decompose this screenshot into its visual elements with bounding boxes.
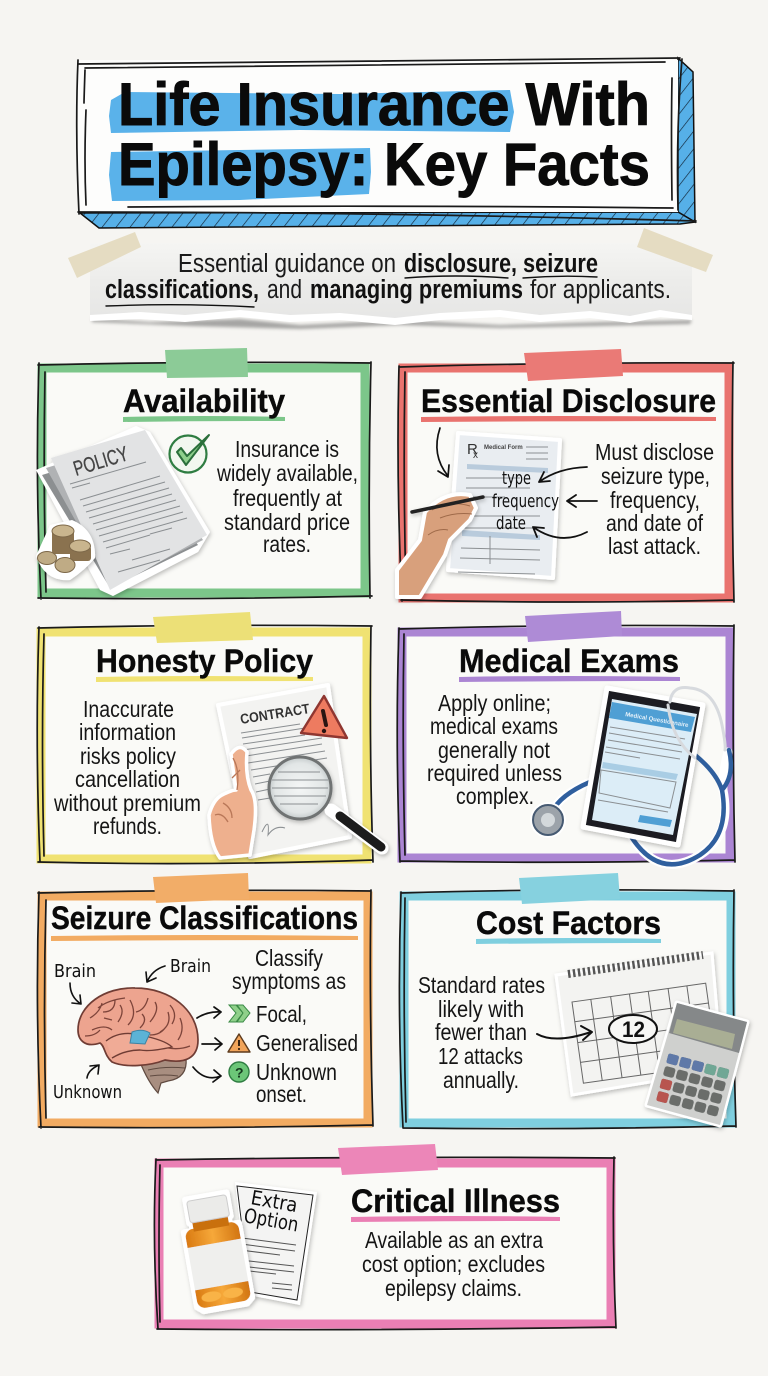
body text: information — [79, 719, 176, 745]
body text: fewer than — [435, 1019, 527, 1045]
body text: Available as an extra — [365, 1227, 544, 1253]
heading: Cost Factors — [476, 905, 661, 941]
body text: seizure type, — [601, 463, 710, 489]
body text: risks policy — [80, 743, 176, 769]
illustration: tablet questionnaire — [583, 688, 703, 845]
body text — [427, 690, 562, 809]
heading: Critical Illness — [351, 1183, 560, 1219]
tape — [519, 873, 620, 904]
subtitle text: managing premiums — [310, 276, 523, 304]
body text: refunds. — [93, 813, 162, 839]
body text: medical exams — [430, 713, 558, 739]
body text: last attack. — [608, 533, 701, 559]
body text: cost option; excludes — [362, 1251, 545, 1277]
panel: critical illness — [154, 1144, 616, 1330]
illustration: stethoscope — [530, 750, 731, 864]
title box — [77, 58, 696, 228]
icon: coins — [36, 520, 95, 580]
subtitle text: Essential guidance on — [178, 250, 396, 278]
arrows: brain labels — [70, 966, 165, 1078]
illustration: policy papers — [36, 426, 210, 596]
body text: Inaccurate — [83, 696, 174, 722]
body text: Generalised — [256, 1030, 358, 1056]
title — [118, 71, 650, 198]
tape — [524, 349, 623, 381]
body text: cancellation — [75, 766, 180, 792]
body text — [216, 436, 358, 557]
illustration: tablet questionnaire: Medical Questionnaire — [625, 712, 689, 729]
arrow: to form — [437, 428, 449, 477]
illustration: hand with pen — [397, 494, 483, 597]
labels: brain parts — [53, 956, 211, 1103]
body text — [418, 972, 545, 1093]
body text: 12 attacks — [438, 1043, 523, 1069]
body text: Must disclose — [595, 439, 714, 465]
icon: magnifying glass — [269, 757, 382, 848]
icon: warning — [228, 1034, 250, 1052]
handwritten labels: frequency — [492, 491, 559, 512]
tape — [338, 1144, 438, 1175]
illustration: medical form: x — [473, 450, 478, 461]
arrows: to classes — [193, 1007, 222, 1082]
tape — [153, 873, 249, 903]
body text: complex. — [456, 783, 534, 809]
illustration: medical form — [448, 433, 560, 578]
body text: symptoms as — [232, 968, 346, 994]
body text: without premium — [53, 790, 201, 816]
title: Epilepsy: Key Facts — [118, 131, 650, 198]
illustration: contract: CONTRACT — [239, 700, 311, 727]
body text — [53, 696, 201, 839]
subtitle text: disclosure, — [404, 250, 517, 278]
body text: frequency, — [610, 487, 700, 513]
callout: circled 12: 12 — [622, 1017, 645, 1042]
body text: Insurance is — [235, 436, 339, 462]
icon: warning triangle — [301, 696, 347, 738]
body text: Apply online; — [438, 690, 551, 716]
subtitle text: seizure — [523, 250, 598, 278]
labels: brain parts: Brain — [54, 961, 96, 982]
body text: widely available, — [216, 460, 358, 486]
illustration: policy papers: POLICY — [71, 442, 131, 481]
subtitle torn paper — [90, 243, 692, 329]
handwritten labels: date — [496, 513, 526, 534]
labels: brain parts: Unknown — [53, 1082, 122, 1103]
subtitle text: classifications, — [105, 276, 259, 304]
body text: Focal, — [256, 1001, 307, 1027]
panel: seizure classifications — [37, 873, 373, 1128]
panel: cost factors — [399, 873, 747, 1129]
icon: chevrons — [229, 1005, 250, 1022]
panel: honesty policy — [37, 612, 382, 864]
illustration: stethoscope earpieces — [668, 688, 725, 758]
panel: medical exams — [397, 611, 735, 864]
heading: Availability — [123, 383, 285, 419]
illustration: extra option paper: Extra — [249, 1185, 300, 1217]
icon: crossed fingers — [209, 747, 255, 858]
heading: Seizure Classifications — [51, 900, 358, 936]
tape — [153, 612, 253, 643]
title highlight strokes — [109, 90, 514, 201]
body text: generally not — [438, 737, 550, 763]
heading: Essential Disclosure — [421, 383, 716, 419]
body text — [232, 945, 358, 1107]
handwritten labels — [492, 468, 559, 534]
labels: brain parts: Brain — [170, 956, 211, 977]
body text: frequently at — [233, 485, 342, 511]
illustration: pill bottle — [178, 1191, 253, 1312]
panel: essential disclosure — [397, 349, 734, 602]
body text: rates. — [263, 531, 311, 557]
illustration: brain — [78, 988, 198, 1093]
icon: check mark — [170, 435, 209, 472]
body text: standard price — [224, 509, 350, 535]
body text: Unknown — [256, 1059, 337, 1085]
heading: Medical Exams — [459, 643, 679, 679]
illustration: extra option paper: Option — [242, 1203, 300, 1236]
body text: epilepsy claims. — [385, 1275, 522, 1301]
tape — [525, 611, 622, 642]
callout: circled 12 — [609, 1015, 657, 1043]
body text: and date of — [606, 510, 703, 536]
handwritten labels: type — [502, 468, 531, 489]
illustration: contract — [218, 685, 350, 857]
illustration: extra option paper — [235, 1182, 317, 1305]
body text: likely with — [438, 996, 524, 1022]
subtitle text: for applicants. — [530, 276, 671, 304]
illustration: calculator — [647, 1003, 747, 1125]
tape right — [637, 228, 713, 272]
body text — [362, 1227, 545, 1301]
body text: onset. — [256, 1081, 307, 1107]
subtitle text: and — [267, 276, 302, 304]
body text: required unless — [427, 760, 562, 786]
heading: Honesty Policy — [96, 643, 313, 679]
icon: question — [229, 1062, 249, 1082]
arrows: to labels — [533, 467, 597, 538]
title: Life Insurance With — [118, 71, 650, 138]
body text: Classify — [255, 945, 323, 971]
panel: availability — [36, 348, 372, 599]
tape left — [68, 232, 141, 278]
body text: Standard rates — [418, 972, 545, 998]
body text: annually. — [443, 1067, 519, 1093]
icon: question: ? — [235, 1064, 244, 1080]
arrow: to calendar — [537, 1026, 592, 1040]
illustration: calendar — [556, 953, 722, 1095]
illustration: medical form: R — [467, 441, 478, 458]
subtitle text — [105, 250, 671, 307]
body text — [595, 439, 714, 559]
illustration: medical form: Medical Form — [484, 445, 523, 451]
tape — [165, 348, 248, 378]
